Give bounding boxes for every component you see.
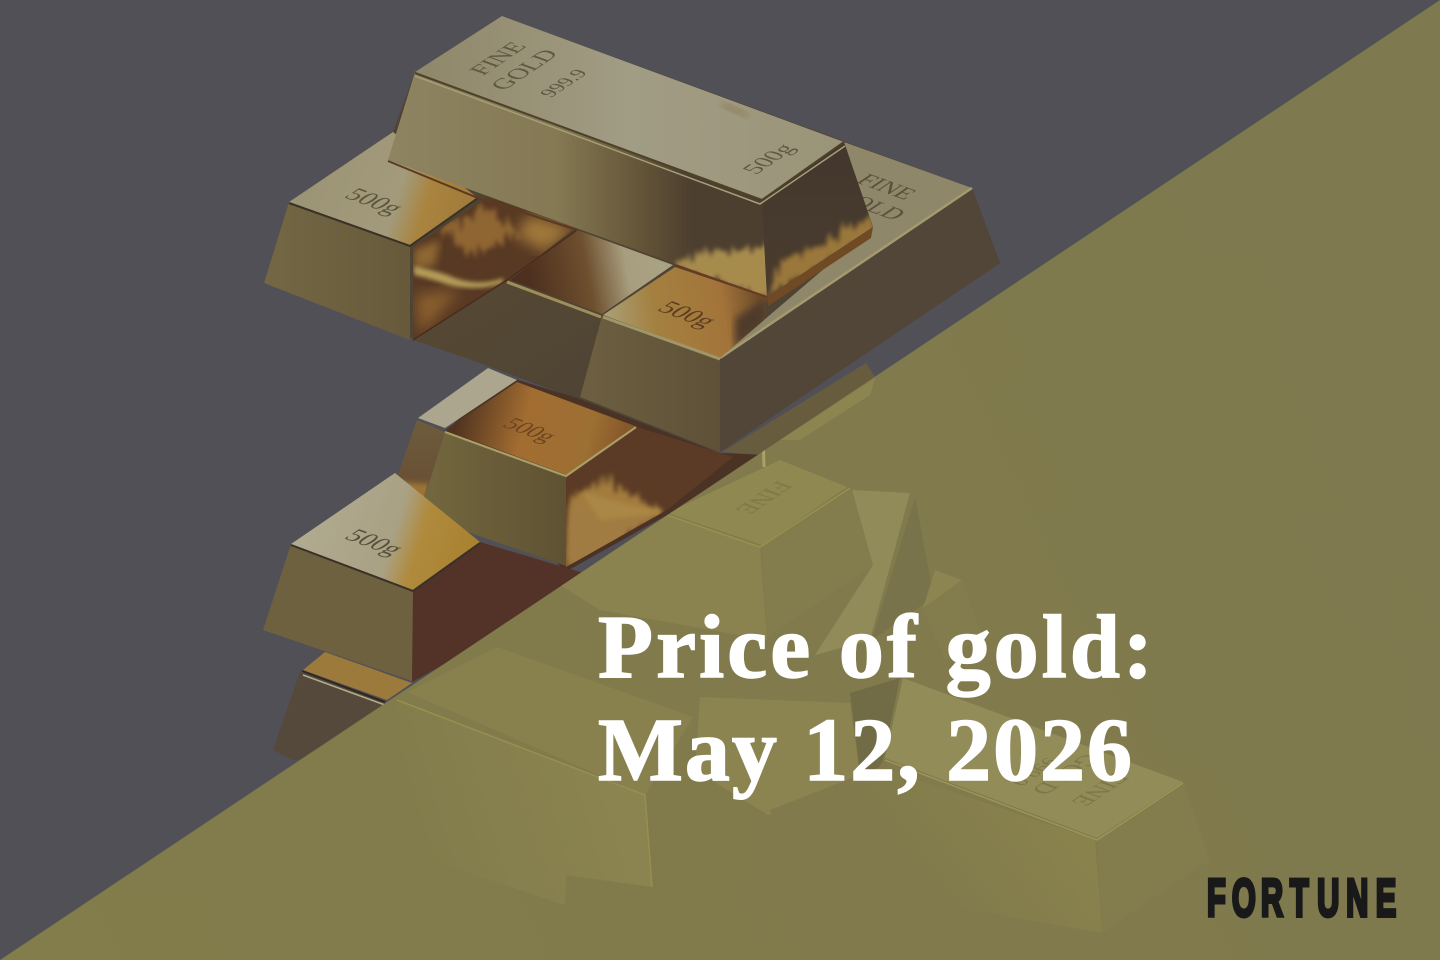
back right bar: highlight edge xyxy=(720,188,972,358)
photo: gold bars lower stack xyxy=(263,368,765,760)
mid edge highlight xyxy=(507,282,601,317)
title line 1: Price of gold: xyxy=(598,598,1153,697)
reflection on right face xyxy=(767,213,873,296)
copper bar right face fur xyxy=(566,480,663,570)
ghost: right bar edge xyxy=(885,760,1183,840)
ghost: lit vertical edge xyxy=(763,432,764,467)
lower bar: edge xyxy=(291,543,480,591)
logo: FORTUNE: FORTUNE xyxy=(1207,870,1396,928)
streak of reflection xyxy=(414,266,503,288)
ghost GOLD: GOLD xyxy=(1025,751,1105,797)
photo: gold bars upper stack xyxy=(264,16,1000,455)
engraved FINE: FINE xyxy=(850,171,922,203)
tile 2 top xyxy=(510,230,673,314)
copper bar: front face xyxy=(419,432,566,566)
warm glow top right xyxy=(515,215,575,252)
ghost: right bar front xyxy=(770,768,1100,912)
left bar: front face xyxy=(264,202,410,340)
strip of bar below the stack xyxy=(722,363,880,455)
shadow at right of gold tile xyxy=(735,298,767,348)
middle bar: front face xyxy=(413,281,601,397)
engraved text: FINE GOLD 999.9 500g on top bar xyxy=(464,39,801,177)
reflection on front face of top bar xyxy=(674,240,767,296)
ghost: upright bar right face xyxy=(762,488,873,637)
ghost: upright edge xyxy=(667,488,850,547)
right bar: front face xyxy=(580,316,720,452)
top gold bar: right face xyxy=(762,142,873,297)
ghost: central bar xyxy=(695,697,863,815)
back right bar: top xyxy=(720,142,972,358)
base silhouette of upper stack xyxy=(264,16,1000,452)
ghost: side bar top xyxy=(923,570,962,608)
warm glow left xyxy=(414,240,440,270)
ghost: right bar top xyxy=(885,678,1183,838)
title line 2: May 12, 2026 xyxy=(598,701,1132,800)
bottom bar: top xyxy=(303,652,412,700)
gold flash on small bar xyxy=(405,480,428,496)
GOLD: GOLD xyxy=(485,47,565,93)
top gold bar: top face xyxy=(415,16,844,200)
ghost: thin bar xyxy=(815,490,910,655)
bottom bar: front xyxy=(273,672,400,760)
right bar edge highlight xyxy=(603,317,720,359)
warm fur upper xyxy=(440,205,520,255)
FINE: FINE xyxy=(464,39,533,78)
ghost: lower left edge xyxy=(397,700,652,887)
ghosted gold bars seen through overlay xyxy=(397,378,1210,933)
back right bar: right face xyxy=(720,188,1000,452)
ghost: light strip below stack xyxy=(780,378,875,440)
ghost: thin bar dark side xyxy=(876,585,890,634)
top bar brown mark xyxy=(719,101,751,119)
top bar edge lines xyxy=(415,73,844,200)
copper bar: right face xyxy=(566,427,733,567)
left bar: top xyxy=(289,132,478,245)
copper bar: top xyxy=(445,382,635,475)
dark shadow base between the stacks xyxy=(445,376,765,572)
separators between tiles xyxy=(413,230,577,340)
engraved text: 500g on left bar: 500g xyxy=(338,184,411,218)
lower bar: top xyxy=(291,473,480,590)
engraved text: 500g on copper bar: 500g xyxy=(496,415,563,446)
title xyxy=(598,598,1153,800)
top gold bar: front face xyxy=(388,72,767,297)
ghost: engraved FINE: FINE xyxy=(729,478,798,517)
ghost: upright bar left face xyxy=(560,515,767,640)
red shadow line under top bar xyxy=(675,265,767,297)
ghost FINE: FINE xyxy=(1065,770,1134,809)
left bar: edge highlight xyxy=(289,198,478,246)
engraved text: 500g on gold tile: 500g xyxy=(651,297,724,331)
lower bar: front xyxy=(263,544,413,681)
ghost: lower left bar front xyxy=(566,766,651,886)
small back bar: top xyxy=(418,368,517,428)
lower gold wash xyxy=(566,505,642,567)
top bar under-edge xyxy=(767,227,873,306)
engraved text: 500g on lower bar: 500g xyxy=(338,525,411,559)
ghost 999.9: 999.9 xyxy=(1005,755,1063,788)
gold tile top with 500g xyxy=(603,267,767,358)
small back bar: front xyxy=(388,420,445,515)
ghost: engraved FINE GOLD 999.9 xyxy=(1013,755,1129,806)
ghost: lower left bar top xyxy=(407,647,693,795)
ghost: right bar end xyxy=(1097,782,1210,933)
500g: 500g xyxy=(737,141,801,177)
copper bar: edge highlight xyxy=(445,427,636,476)
ghost: gap dark xyxy=(850,678,900,769)
ghost: upright bar top xyxy=(667,460,847,545)
lower bar: dark right face xyxy=(412,542,600,682)
warm glow lower xyxy=(415,290,460,335)
copper tile 1 with reflected fur xyxy=(413,197,574,339)
bottom bar: white edge xyxy=(302,671,385,702)
engraved text: FINE GOLD on back bar xyxy=(827,171,922,224)
bright streak xyxy=(586,494,664,518)
ghost: side bar right xyxy=(923,580,982,660)
999.9: 999.9 xyxy=(535,67,593,100)
engraved GOLD: GOLD xyxy=(827,187,911,224)
